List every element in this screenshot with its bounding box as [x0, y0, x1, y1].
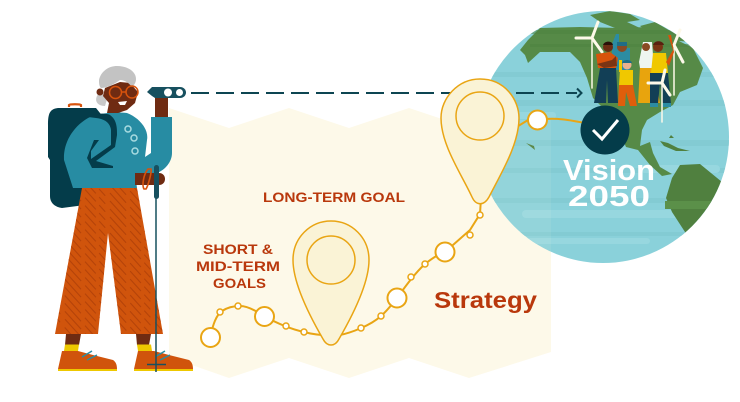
backpack	[48, 108, 104, 208]
trekking pole	[147, 165, 166, 372]
land: Caribbean	[526, 135, 690, 151]
icon: wind turbines	[576, 22, 683, 95]
path: route of goals	[210, 119, 590, 337]
person: mustard skirt	[638, 66, 660, 103]
jacket	[64, 112, 172, 188]
land: South America	[666, 164, 721, 232]
label: short and mid-term goals: GOALS	[213, 276, 266, 291]
person: teal shirt	[612, 34, 630, 70]
neck and face	[103, 82, 138, 113]
arrow: line of sight to vision	[191, 88, 582, 98]
ear	[96, 88, 104, 96]
jacket buttons	[125, 126, 138, 154]
pin: short and mid-term goal	[293, 221, 369, 345]
raised arm	[155, 98, 168, 117]
globe: Vision 2050 world	[477, 11, 729, 263]
icon: check badge	[580, 106, 630, 154]
trouser hatching	[58, 188, 163, 334]
illustration: community group	[594, 34, 674, 107]
label: Vision 2050: 2050	[568, 181, 650, 213]
label: Vision 2050: Vision	[563, 155, 655, 187]
pin: long-term goal	[441, 79, 519, 204]
shoulder strap	[87, 114, 117, 168]
person: orange shirt	[594, 68, 618, 103]
binoculars	[147, 87, 186, 98]
figure: hiker	[40, 60, 193, 372]
label: short and mid-term goals	[196, 242, 280, 291]
hair back	[96, 93, 108, 106]
milestones	[201, 110, 547, 347]
label: short and mid-term goals: MID-TERM	[196, 259, 280, 274]
map tint over globe	[492, 120, 551, 252]
backpack handle	[69, 104, 81, 107]
trousers	[55, 188, 163, 334]
icon: front wind turbine	[648, 70, 670, 122]
land: North America	[520, 27, 703, 176]
shoes	[58, 351, 193, 369]
panel: strategy map	[169, 108, 551, 378]
person: raised arm	[650, 73, 671, 104]
land: Arctic islands	[590, 11, 690, 42]
hand and grip	[135, 173, 165, 185]
label: Vision 2050	[563, 155, 655, 213]
label: short and mid-term goals: SHORT &	[203, 242, 273, 257]
smile	[118, 101, 127, 105]
label: long-term goal: LONG-TERM GOAL	[263, 190, 405, 205]
label: strategy: Strategy	[434, 287, 537, 313]
ankles and socks	[65, 334, 151, 345]
glasses	[110, 86, 138, 98]
hair	[99, 66, 136, 88]
person: child	[618, 85, 637, 106]
